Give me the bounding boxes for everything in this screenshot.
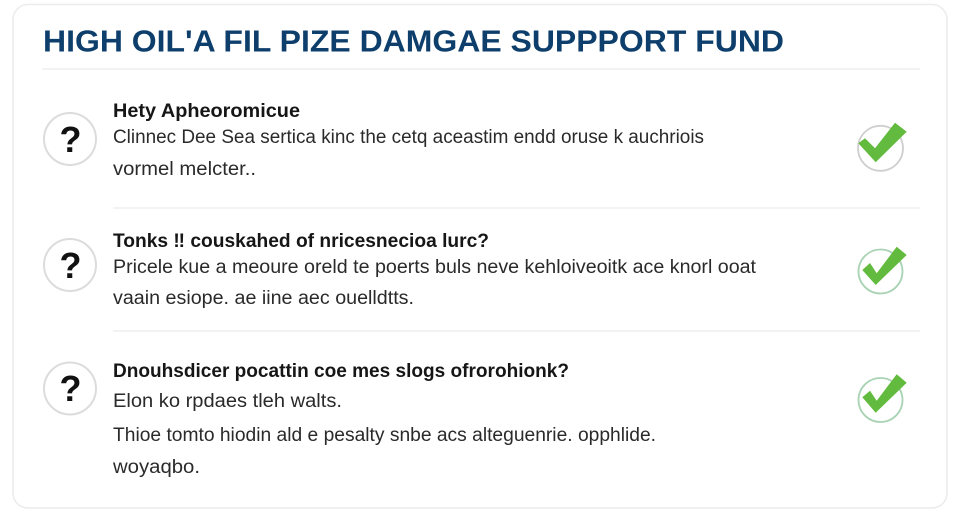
icon: question mark 3	[44, 362, 96, 414]
icon: check mark 3	[858, 374, 907, 422]
text block: answer 2	[113, 257, 757, 309]
text block: answer 3	[112, 391, 656, 478]
icon: question mark 2	[44, 239, 96, 291]
icon: check mark 2	[858, 247, 907, 294]
heading: question 2: Tonks ‼ couskahed of nricesnecioa lurc?	[113, 231, 489, 252]
heading: question 3: Dnouhsdicer pocattin coe mes slogs ofrorohionk?	[113, 361, 569, 382]
icon: question mark 1: ?	[60, 119, 82, 160]
icon: question mark 1	[44, 113, 96, 165]
panel: question 2	[44, 231, 907, 309]
panel: question 3	[44, 361, 907, 478]
text block: answer 3: woyaqbo.	[112, 457, 200, 478]
panel: question 1	[44, 101, 907, 180]
text block: answer 2: Pricele kue a meoure oreld te poerts buls neve kehloiveoitk ace knorl ooat	[113, 257, 757, 278]
icon: check mark 1	[858, 123, 907, 171]
text block: answer 2: vaain esiope. ae iine aec ouelldtts.	[113, 288, 414, 309]
heading: question 1: Hety Apheoromicue	[113, 101, 300, 122]
text block: answer 3: Elon ko rpdaes tleh walts.	[113, 391, 342, 412]
icon: question mark 2: ?	[60, 245, 82, 286]
title: HIGH OIL'A FIL PIZE DAMGAE SUPPPORT FUND	[43, 24, 784, 59]
icon: question mark 3: ?	[60, 368, 82, 409]
text block: answer 1	[113, 127, 704, 180]
text block: answer 3: Thioe tomto hiodin ald e pesalty snbe acs alteguenrie. opphlide.	[113, 425, 656, 446]
text block: answer 1: Clinnec Dee Sea sertica kinc the cetq aceastim endd oruse k auchriois	[113, 127, 704, 148]
text block: answer 1: vormel melcter..	[113, 159, 256, 180]
